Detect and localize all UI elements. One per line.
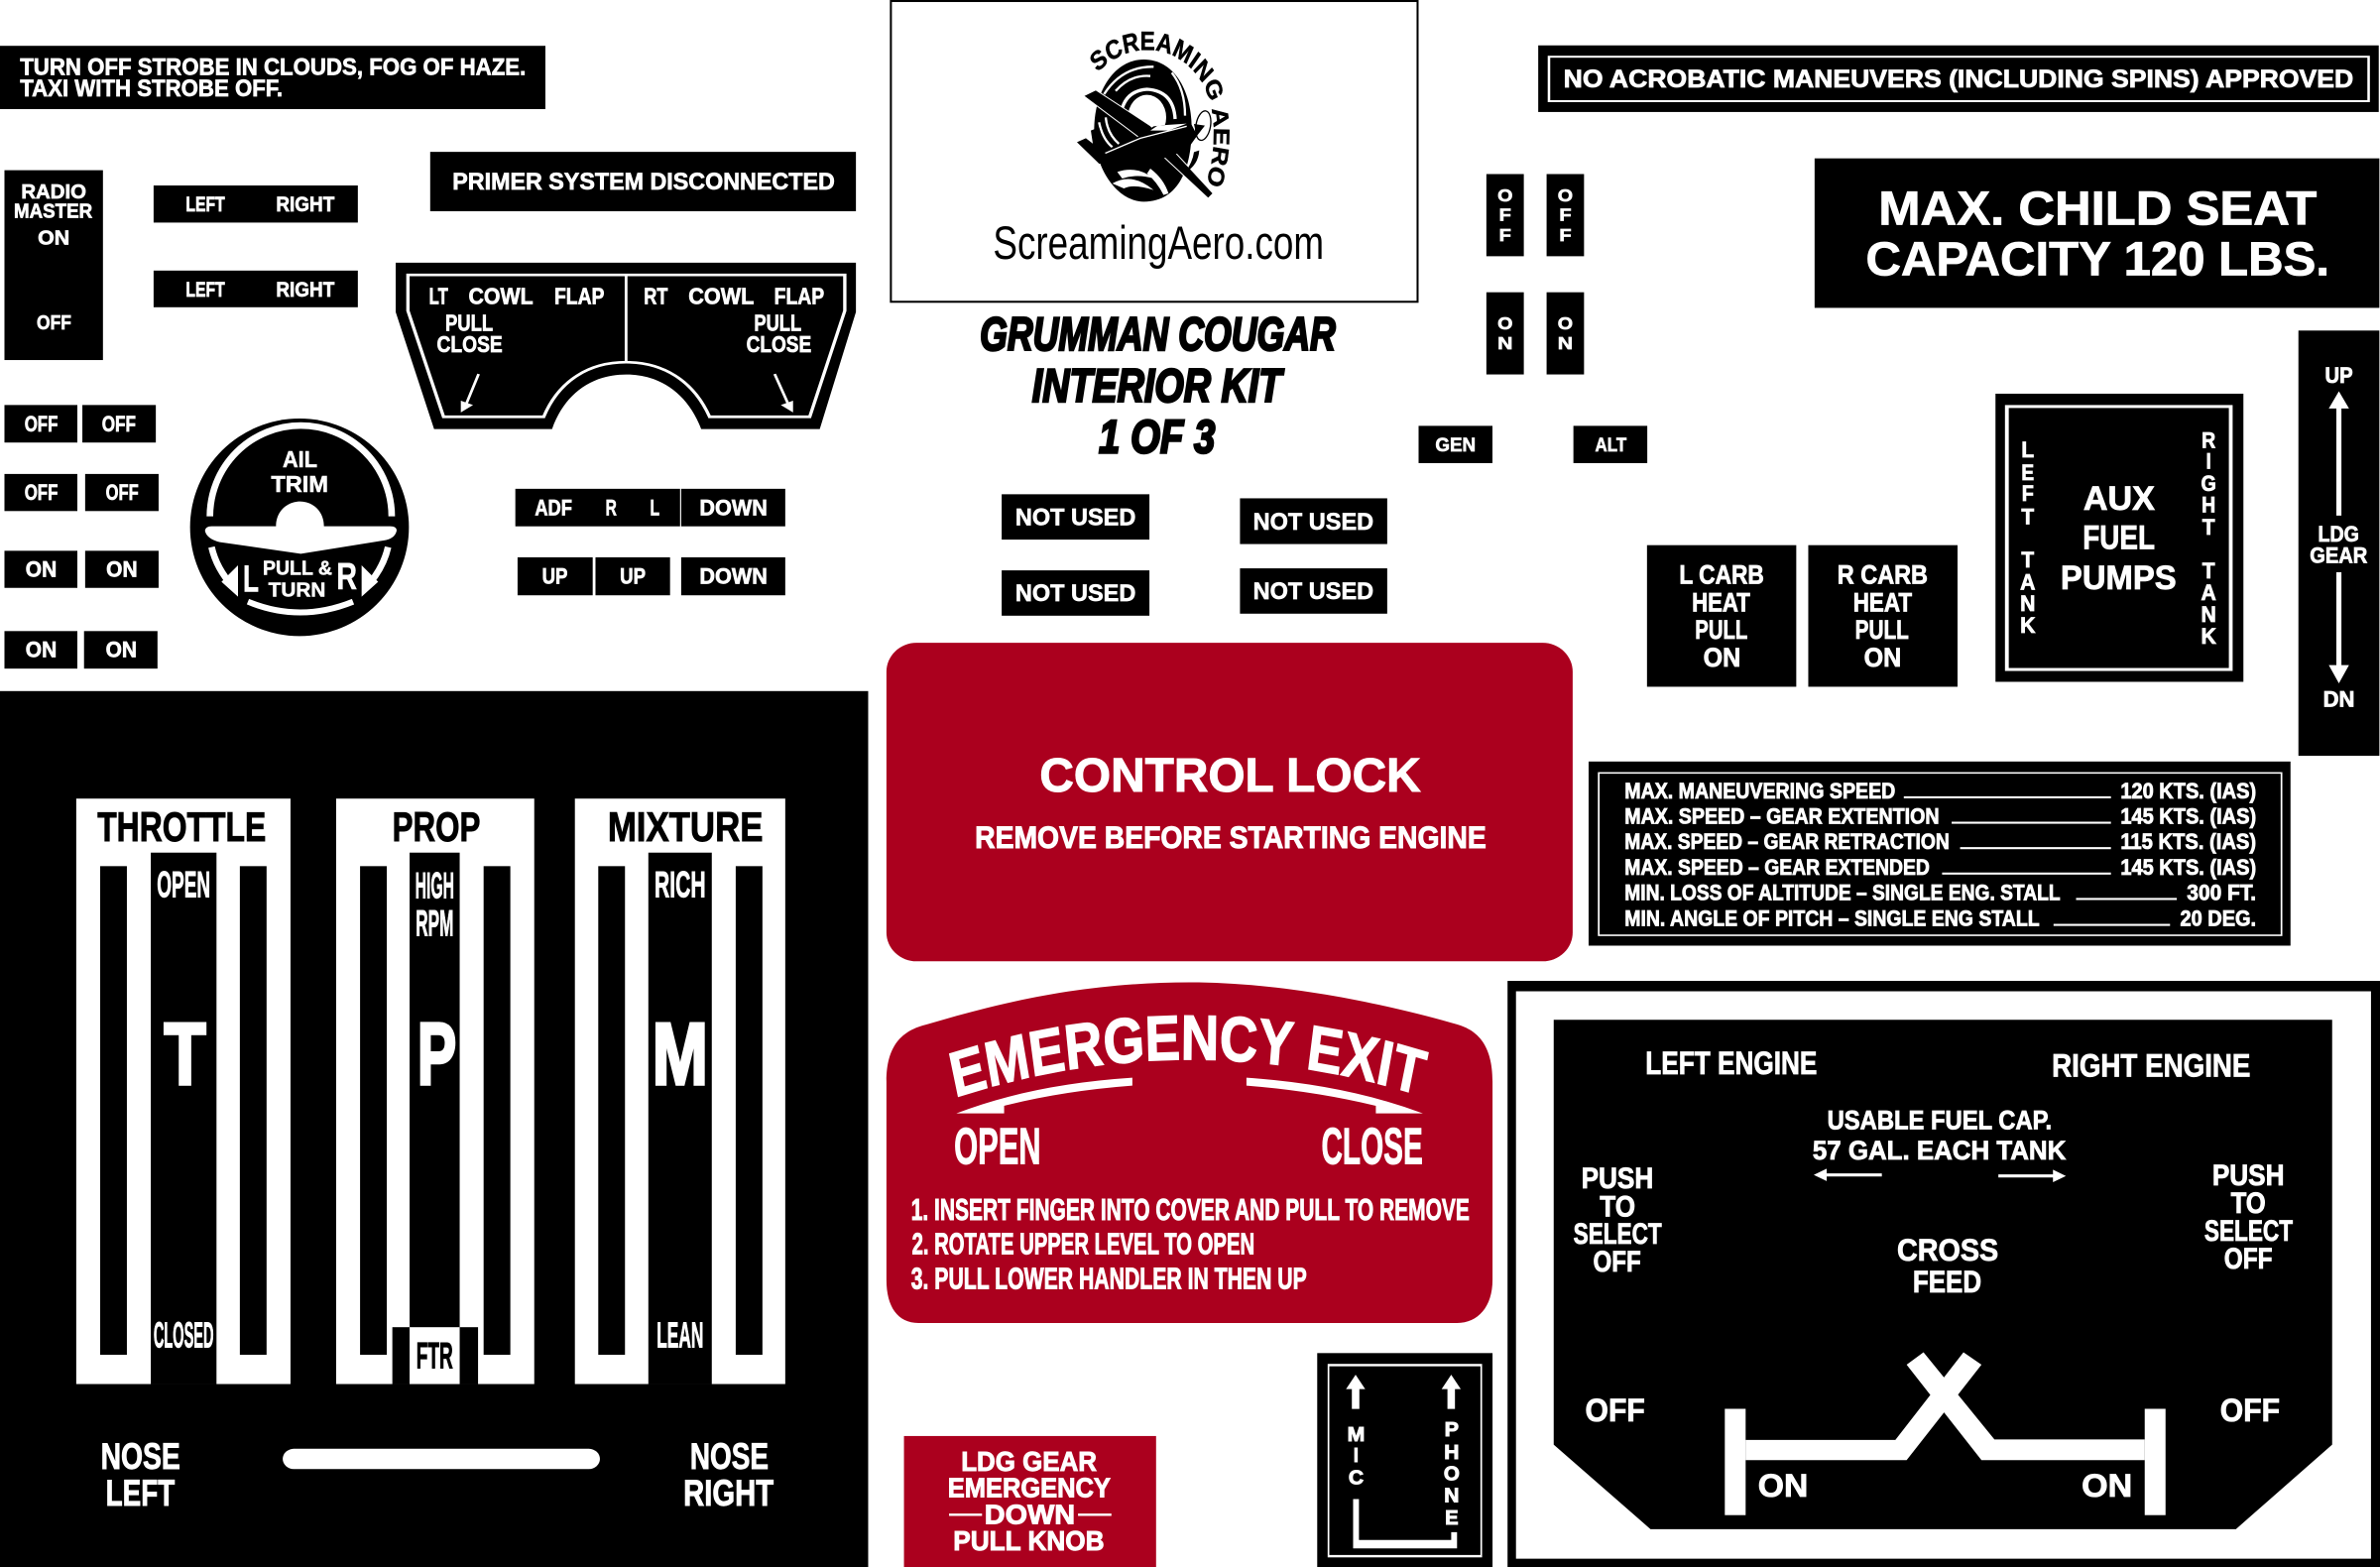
left tank vertical label: N: [2020, 592, 2035, 616]
left tank vertical label: T: [2021, 548, 2035, 572]
placard: R carb heat: HEAT: [1853, 587, 1912, 617]
placard: speed limits: 115 KTS. (IAS): [2120, 829, 2256, 854]
placards: not used: NOT USED: [1253, 577, 1373, 604]
placards: on on row three: ON: [26, 558, 57, 582]
placard: GEN: GEN: [1435, 433, 1476, 456]
prop lever placard: FTR: [416, 1334, 453, 1377]
placard: speed limits: 145 KTS. (IAS): [2120, 803, 2256, 828]
placard: radio master: RADIO: [21, 180, 86, 202]
throttle lever placard: CLOSED: [154, 1314, 214, 1356]
placards: vertical on switches: N: [1497, 334, 1512, 354]
arrow: up: [2328, 391, 2349, 516]
placard: speed limits: MAX. SPEED – GEAR EXTENTION: [1624, 803, 1940, 828]
placard: radio master: ON: [38, 226, 69, 249]
left tank vertical label: L: [2021, 438, 2034, 462]
placard: strobe warning: TAXI WITH STROBE OFF.: [20, 74, 283, 101]
placard: aileron trim dial: R: [336, 555, 357, 598]
panel: logo box: [890, 0, 1418, 303]
placard: speed limits: MAX. MANEUVERING SPEED: [1624, 779, 1895, 803]
placard: mic phone: C: [1349, 1466, 1364, 1489]
arrow: open: [956, 1078, 1132, 1114]
placard: primer system disconnected: PRIMER SYSTEM DISCONNECTED: [452, 168, 835, 194]
placard: speed limits: 145 KTS. (IAS): [2120, 855, 2256, 880]
panel: fuel selector: FEED: [1913, 1264, 1981, 1299]
placard: landing gear up down: LDG: [2319, 523, 2359, 546]
prop lever placard: [336, 798, 535, 1385]
placard: mic phone: [1317, 1353, 1492, 1567]
placard: speed limits: MIN. LOSS OF ALTITUDE – SINGLE ENG. STALL: [1624, 880, 2061, 904]
placards: not used: NOT USED: [1015, 503, 1135, 531]
mixture lever placard: M: [653, 1005, 708, 1103]
placards: off off row two: OFF: [106, 481, 139, 505]
placard: cowl flap: FLAP: [774, 284, 824, 309]
panel: fuel selector: ON: [2082, 1468, 2132, 1505]
placard: R carb heat: [1808, 545, 1958, 686]
placards: vertical off switches: F: [1559, 205, 1572, 225]
placard: mic phone: M: [1348, 1422, 1365, 1445]
placard: cowl flap: CLOSE: [437, 331, 503, 357]
placards: vertical off switches: F: [1559, 226, 1572, 245]
placards: off off row one: OFF: [102, 413, 136, 436]
placard: ADF R L down: R: [606, 497, 617, 521]
placard: cowl flap: LT: [429, 284, 448, 309]
placard: landing gear up down: DN: [2323, 687, 2354, 712]
placard: aileron trim dial: PULL &: [263, 556, 332, 579]
placard: cowl flap: [396, 263, 856, 429]
placard: no acrobatic maneuvers: [1538, 46, 2379, 112]
placards: not used: [1002, 494, 1387, 616]
placard: control lock: CONTROL LOCK: [1039, 748, 1421, 801]
title: [980, 308, 1336, 463]
placard: ADF R L down: DOWN: [699, 497, 768, 521]
arrow: down: [2328, 572, 2349, 683]
right tank vertical label: T: [2202, 559, 2215, 583]
arrow: right tank: [1998, 1169, 2066, 1182]
placard: L carb heat: HEAT: [1692, 587, 1750, 617]
placard: cowl flap: FLAP: [554, 284, 604, 309]
right tank vertical label: [2202, 429, 2216, 649]
placards: vertical off switches: O: [1497, 186, 1512, 205]
left tank vertical label: [2020, 438, 2035, 638]
placard: cowl flap: PULL: [445, 310, 493, 336]
placards: on on row four: [4, 631, 158, 668]
placards: off off row one: OFF: [25, 413, 58, 436]
placard: GEN: [1419, 425, 1492, 463]
placard: emergency exit: 1. INSERT FINGER INTO COVER AND PULL TO REMOVE: [911, 1192, 1470, 1227]
throttle lever placard: THROTTLE: [97, 803, 266, 850]
logo website: ScreamingAero.com: [993, 217, 1324, 270]
placard: ADF R L down: ADF: [535, 497, 572, 521]
rudder trim slot and nose labels: LEFT: [106, 1472, 175, 1513]
placard: R carb heat: PULL: [1855, 615, 1909, 645]
placards: vertical on switches: O: [1497, 314, 1512, 333]
placard: cowl flap: CLOSE: [747, 331, 811, 357]
placard: ALT: [1574, 425, 1647, 463]
placard: aileron trim dial: L: [243, 558, 259, 601]
placard: up up down: UP: [542, 564, 567, 589]
placards: off off row two: OFF: [25, 481, 58, 505]
panel: fuel selector: PUSH: [2212, 1159, 2285, 1192]
placard: L carb heat: PULL: [1695, 615, 1747, 645]
placard: aileron trim dial: [190, 419, 409, 636]
placard: up up down: DOWN: [699, 564, 768, 589]
rudder trim slot and nose labels: [101, 1435, 774, 1513]
panel: throttle quadrant: [0, 691, 868, 1567]
rudder trim slot and nose labels: NOSE: [101, 1435, 180, 1477]
right tank vertical label: T: [2202, 516, 2215, 540]
emergency exit curved heading: EMERGENCY EXIT: [948, 1016, 1429, 1097]
mixture lever placard: MIXTURE: [608, 803, 763, 850]
panel: fuel selector: SELECT: [2204, 1215, 2293, 1248]
placards: not used: NOT USED: [1253, 508, 1373, 535]
placard: strobe warning: [0, 46, 545, 109]
placard: ALT: ALT: [1596, 433, 1627, 456]
placard: radio master: MASTER: [14, 199, 92, 222]
placard: aux fuel pumps: AUX: [2083, 480, 2155, 518]
throttle lever placard: OPEN: [157, 863, 210, 905]
placard: left right upper: [154, 185, 358, 222]
arrow: close: [1247, 1078, 1423, 1114]
placards: vertical on switches: O: [1558, 314, 1573, 333]
placard: speed limits: [1589, 762, 2291, 945]
left tank vertical label: F: [2022, 482, 2034, 506]
placard: ADF R L down: [516, 489, 785, 527]
placard: cowl flap: RT: [644, 284, 667, 309]
placard: aux fuel pumps: PUMPS: [2061, 559, 2177, 597]
rudder trim slot and nose labels: NOSE: [690, 1435, 769, 1477]
placard: L carb heat: ON: [1704, 643, 1740, 672]
placard: left right lower: [154, 271, 358, 307]
placard: cowl flap: COWL: [688, 284, 754, 309]
panel: fuel selector: [1507, 981, 2380, 1567]
placard: speed limits: 20 DEG.: [2180, 905, 2256, 930]
placards: vertical off switches: F: [1499, 226, 1511, 245]
prop lever placard: RPM: [416, 903, 453, 944]
arrow: phone up: [1442, 1375, 1461, 1409]
right tank vertical label: N: [2202, 603, 2216, 627]
throttle lever placard: [76, 798, 291, 1385]
placards: vertical off switches: [1487, 175, 1584, 256]
placard: control lock: REMOVE BEFORE STARTING ENGINE: [975, 819, 1487, 855]
placard: emergency exit: [887, 982, 1493, 1323]
right tank vertical label: A: [2202, 581, 2216, 605]
placard: mic phone: H: [1444, 1440, 1459, 1464]
placard: aileron trim dial: TURN: [269, 579, 325, 602]
placards: on on row four: ON: [26, 638, 57, 663]
placard: speed limits: 120 KTS. (IAS): [2120, 779, 2256, 803]
right tank vertical label: K: [2202, 625, 2216, 649]
title: 1 OF 3: [1099, 411, 1216, 463]
right tank vertical label: G: [2202, 472, 2216, 496]
placard: up up down: [518, 557, 785, 595]
arrow: mic up: [1346, 1375, 1366, 1409]
placard: mic phone: P: [1445, 1417, 1459, 1441]
title: INTERIOR KIT: [1032, 359, 1284, 412]
placard: landing gear emergency: DOWN: [985, 1500, 1075, 1530]
placard: radio master: OFF: [37, 311, 71, 334]
panel: fuel selector: OFF: [2220, 1392, 2280, 1429]
right tank vertical label: R: [2202, 429, 2215, 453]
prop lever placard: PROP: [393, 803, 480, 850]
placards: vertical off switches: F: [1499, 205, 1511, 225]
placards: on on row four: ON: [106, 638, 137, 663]
placard: speed limits: MAX. SPEED – GEAR EXTENDED: [1624, 855, 1930, 880]
placard: landing gear up down: UP: [2325, 364, 2353, 388]
prop lever placard: P: [417, 1005, 456, 1103]
left tank vertical label: T: [2021, 505, 2035, 530]
placard: landing gear emergency: [904, 1436, 1156, 1567]
placard: speed limits: MAX. SPEED – GEAR RETRACTION: [1624, 829, 1950, 854]
placard: emergency exit: 2. ROTATE UPPER LEVEL TO OPEN: [912, 1226, 1254, 1261]
panel: fuel selector: ON: [1758, 1468, 1808, 1505]
panel: fuel selector: OFF: [1586, 1392, 1645, 1429]
placard: speed limits: 300 FT.: [2187, 880, 2256, 904]
mixture lever placard: RICH: [654, 863, 706, 905]
right tank vertical label: I: [2206, 449, 2211, 474]
placard: cowl flap: PULL: [754, 310, 801, 336]
placard: L carb heat: L CARB: [1679, 559, 1764, 590]
placard: left right upper: RIGHT: [276, 193, 334, 216]
placard: aileron trim dial: TRIM: [271, 471, 328, 497]
panel: fuel selector: RIGHT ENGINE: [2052, 1048, 2250, 1084]
placard: emergency exit: CLOSE: [1321, 1119, 1423, 1175]
placard: emergency exit: OPEN: [954, 1119, 1041, 1175]
panel: fuel selector: PUSH: [1582, 1162, 1653, 1195]
panel: fuel selector: CROSS: [1897, 1232, 1998, 1267]
placard: mic phone: I: [1354, 1443, 1359, 1467]
placard: emergency exit: 3. PULL LOWER HANDLER IN THEN UP: [911, 1262, 1307, 1295]
rudder trim slot and nose labels: RIGHT: [683, 1472, 774, 1513]
placard: mic phone: E: [1445, 1506, 1459, 1529]
icon: screaming aero plane logo: SCREAMING AERO: [1091, 32, 1230, 186]
placard: primer system disconnected: [430, 152, 856, 211]
placard: landing gear emergency: EMERGENCY: [948, 1473, 1111, 1505]
panel: fuel selector: 57 GAL. EACH TANK: [1813, 1136, 2067, 1166]
panel: fuel selector: SELECT: [1574, 1218, 1662, 1251]
placard: R carb heat: ON: [1864, 643, 1901, 672]
placards: vertical off switches: O: [1558, 186, 1573, 205]
right tank vertical label: H: [2202, 493, 2215, 518]
placard: strobe warning: TURN OFF STROBE IN CLOUDS, FOG OF HAZE.: [20, 54, 526, 80]
placard: ADF R L down: L: [650, 497, 659, 521]
placards: off off row two: [4, 474, 159, 511]
placard: mic phone: O: [1444, 1462, 1460, 1485]
placard: landing gear emergency: PULL KNOB: [953, 1526, 1105, 1557]
panel: fuel selector: TO: [2231, 1187, 2266, 1220]
panel: fuel selector: OFF: [2224, 1243, 2273, 1274]
title: GRUMMAN COUGAR: [980, 308, 1336, 361]
crossfeed diagram: [1725, 1352, 2166, 1515]
panel: fuel selector: OFF: [1593, 1246, 1641, 1278]
placard: up up down: UP: [620, 564, 646, 589]
placard: max child seat capacity: [1815, 159, 2379, 307]
arrow: left tank: [1814, 1168, 1882, 1181]
placards: vertical on switches: [1487, 293, 1584, 375]
panel: fuel selector: LEFT ENGINE: [1645, 1045, 1817, 1082]
placard: left right lower: RIGHT: [276, 278, 334, 301]
placard: control lock: [887, 643, 1573, 961]
mixture lever placard: [575, 798, 785, 1385]
placards: off off row one: [4, 405, 156, 442]
throttle lever placard: T: [165, 1005, 206, 1103]
placard: left right lower: LEFT: [185, 278, 225, 301]
panel: fuel selector: TO: [1600, 1191, 1635, 1223]
placard: R carb heat: R CARB: [1838, 559, 1928, 590]
placard: landing gear emergency: LDG GEAR: [961, 1447, 1097, 1478]
placards: on on row three: ON: [106, 558, 138, 582]
placard: aux fuel pumps: [1995, 394, 2243, 681]
left tank vertical label: K: [2020, 614, 2035, 638]
placard: cowl flap: COWL: [469, 284, 534, 309]
left tank vertical label: A: [2020, 570, 2035, 595]
placard: left right upper: LEFT: [185, 193, 225, 216]
placard: aileron trim dial: AIL: [283, 446, 317, 472]
placards: not used: NOT USED: [1015, 579, 1135, 606]
placards: vertical on switches: N: [1558, 334, 1573, 354]
placard: aux fuel pumps: FUEL: [2082, 520, 2155, 556]
placard: mic phone: N: [1444, 1484, 1459, 1507]
placard: speed limits: MIN. ANGLE OF PITCH – SINGLE ENG STALL: [1624, 905, 2040, 930]
placards: on on row three: [4, 550, 159, 588]
placard: landing gear up down: [2299, 330, 2379, 756]
placard: radio master: [4, 171, 103, 360]
placard: L carb heat: [1647, 545, 1796, 686]
left tank vertical label: E: [2021, 461, 2034, 485]
prop lever placard: HIGH: [416, 864, 454, 906]
panel: fuel selector: USABLE FUEL CAP.: [1828, 1106, 2052, 1136]
mixture lever placard: LEAN: [656, 1314, 703, 1356]
